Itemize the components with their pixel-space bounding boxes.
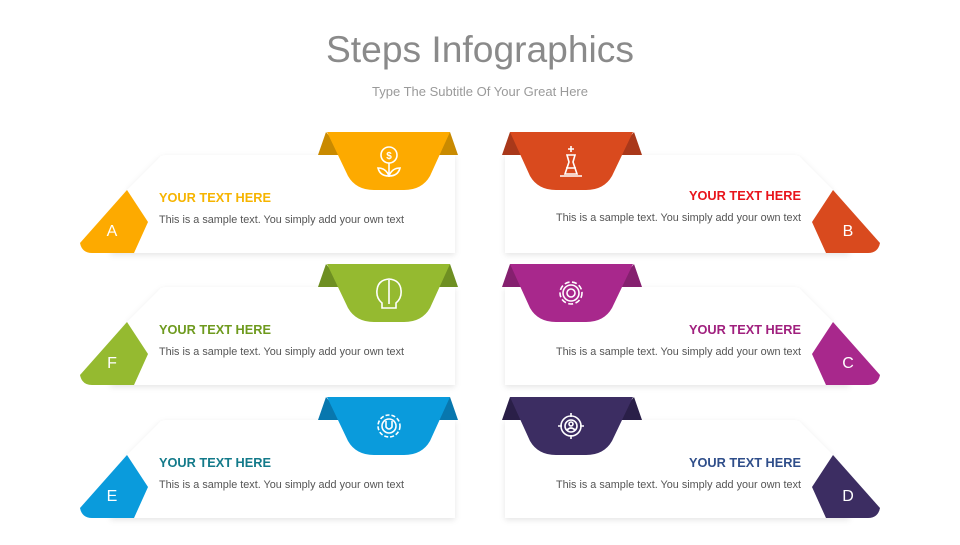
panel: D: This is a sample text. You simply add your own text bbox=[556, 479, 801, 491]
icon: gear bbox=[560, 282, 582, 304]
icon: money plant bbox=[378, 147, 400, 177]
panel: A: This is a sample text. You simply add your own text bbox=[159, 214, 404, 226]
subtitle: Type The Subtitle Of Your Great Here bbox=[372, 84, 588, 99]
panel: D bbox=[502, 397, 880, 518]
panel: B: B bbox=[843, 223, 853, 240]
panel: B bbox=[502, 132, 880, 253]
icon: brain bbox=[377, 279, 401, 308]
panel: E: This is a sample text. You simply add your own text bbox=[159, 479, 404, 491]
panel: A: A bbox=[107, 223, 118, 240]
panel: B: YOUR TEXT HERE bbox=[689, 188, 801, 203]
panel: A: $ bbox=[386, 151, 392, 162]
icon: target person bbox=[558, 413, 584, 439]
panel: E: YOUR TEXT HERE bbox=[159, 455, 271, 470]
panel: D: D bbox=[842, 488, 854, 505]
panel: C: YOUR TEXT HERE bbox=[689, 322, 801, 337]
panel: B: This is a sample text. You simply add your own text bbox=[556, 212, 801, 224]
panel: A: YOUR TEXT HERE bbox=[159, 190, 271, 205]
icon: gear wrench bbox=[378, 415, 400, 437]
panel: D: YOUR TEXT HERE bbox=[689, 455, 801, 470]
panel: F bbox=[80, 264, 458, 385]
panel: C: C bbox=[842, 355, 854, 372]
icon: chess king bbox=[560, 146, 582, 176]
panel: E bbox=[80, 397, 458, 518]
panel: C bbox=[502, 264, 880, 385]
title: Steps Infographics bbox=[326, 29, 634, 70]
panel: F: F bbox=[107, 355, 117, 372]
panel: A bbox=[80, 132, 458, 253]
panel: F: YOUR TEXT HERE bbox=[159, 322, 271, 337]
panel: F: This is a sample text. You simply add your own text bbox=[159, 346, 404, 358]
panel: C: This is a sample text. You simply add your own text bbox=[556, 346, 801, 358]
panel: E: E bbox=[107, 488, 117, 505]
